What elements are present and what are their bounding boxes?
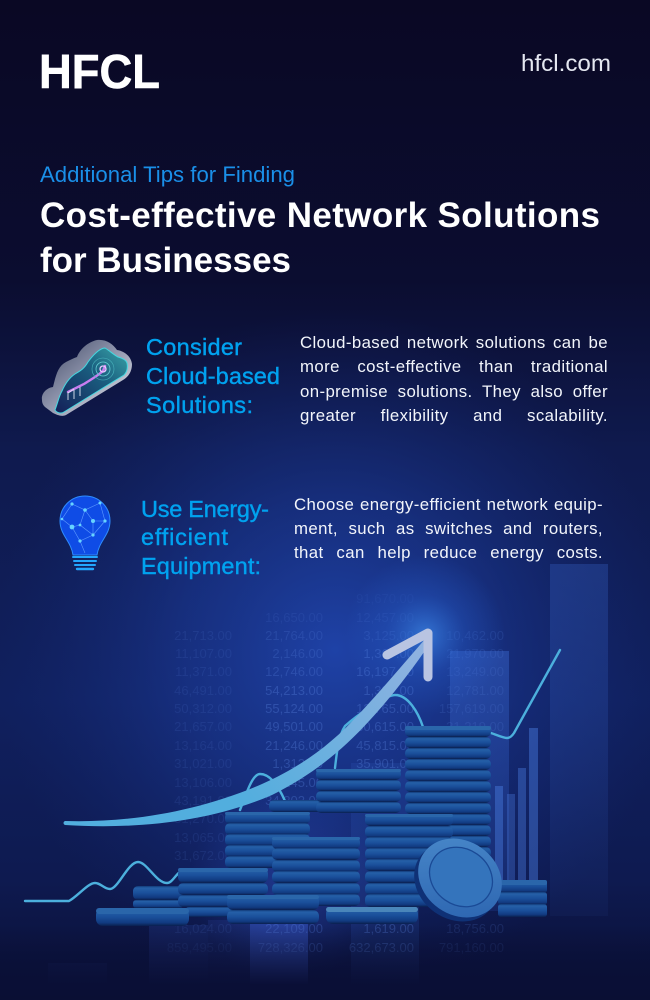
background financial figures table: 859,495.00 — [167, 940, 232, 955]
background financial figures table: 1,367.00 — [363, 646, 414, 661]
background financial figures table: 30,615.00 — [356, 719, 414, 734]
background financial figures table: 11,107.00 — [175, 646, 232, 661]
background financial figures table: 791,160.00 — [439, 940, 504, 955]
background financial figures table: 16,197.00 — [356, 664, 414, 679]
background financial figures table: 31,270.00 — [174, 811, 232, 826]
background financial figures table: 1,312.00 — [272, 756, 323, 771]
background financial figures table: 21,764.00 — [265, 628, 323, 643]
background financial figures table: 728,326.00 — [258, 940, 323, 955]
background financial figures table: 11,371.00 — [175, 664, 232, 679]
background financial figures table: 31,021.00 — [174, 756, 232, 771]
background financial figures table: 13,164.00 — [174, 738, 232, 753]
body text: cloud-based solutions: greater flexibility and scalability. — [300, 406, 608, 425]
background financial figures table: 21,657.00 — [174, 719, 232, 734]
thin trend line — [25, 650, 560, 901]
heading: use energy-efficient equipment: Equipment: — [141, 553, 261, 579]
background financial figures table — [167, 591, 504, 955]
background financial figures table: 35,901.00 — [356, 756, 414, 771]
background financial figures table: 13,106.00 — [174, 775, 232, 790]
background financial figures table: 13,249.00 — [446, 664, 504, 679]
loose coin: front right — [326, 907, 418, 924]
heading: consider cloud-based solutions: Solutions: — [146, 392, 253, 418]
background financial figures table: 50,312.00 — [174, 701, 232, 716]
background financial figures table: 16,650.00 — [265, 610, 323, 625]
background financial figures table: 12,457.00 — [356, 610, 414, 625]
subtitle: Additional Tips for Finding — [40, 162, 295, 187]
background financial figures table: 22,109.00 — [265, 921, 323, 936]
background financial figures table: 1,327.00 — [363, 683, 414, 698]
icon: isometric cloud — [42, 340, 132, 416]
background financial figures table: 46,491.00 — [174, 683, 232, 698]
background financial figures table: 55,124.00 — [265, 701, 323, 716]
panel: cloud-based solutions — [42, 333, 608, 425]
body text: energy-efficient equipment — [294, 495, 603, 562]
heading: use energy-efficient equipment: Use Energy- — [141, 496, 269, 522]
background financial figures table: 2,245.00 — [272, 775, 323, 790]
title: for Businesses — [40, 241, 291, 280]
background financial figures table: 13,765.00 — [356, 701, 414, 716]
large upright coin — [399, 822, 517, 938]
background financial figures table: 12,746.00 — [265, 664, 323, 679]
coin stack: small rear — [269, 769, 401, 813]
website address: hfcl.com — [521, 50, 611, 76]
coin stack: centre left — [225, 812, 310, 868]
background bar chart — [48, 564, 608, 1000]
heading: use energy-efficient equipment: efficient — [141, 524, 228, 550]
background financial figures table: 12,781.00 — [446, 683, 504, 698]
body text: energy-efficient equipment: ment, such as switches and routers, — [294, 519, 603, 538]
background financial figures table: 31,219.00 — [446, 719, 504, 734]
heading: consider cloud-based solutions: Cloud-based — [146, 363, 280, 389]
coin stack: front two — [227, 895, 319, 924]
heading: use energy-efficient equipment — [141, 496, 269, 580]
coin stack: left short — [133, 868, 268, 917]
body text: cloud-based solutions: Cloud-based network solutions can be — [300, 333, 608, 352]
background financial figures table: 10,462.00 — [446, 628, 504, 643]
background financial figures table: 157,619.00 — [439, 701, 504, 716]
heading: consider cloud-based solutions — [146, 334, 280, 418]
coin stack: rear right — [498, 880, 547, 917]
body text: cloud-based solutions: on-premise solutions. They also offer — [300, 382, 608, 401]
background financial figures table: 45,815.00 — [356, 738, 414, 753]
body text: energy-efficient equipment: that can help reduce energy costs. — [294, 543, 603, 562]
heading: consider cloud-based solutions: Consider — [146, 334, 242, 360]
background financial figures table: 16,024.00 — [174, 921, 232, 936]
coin stacks — [96, 726, 547, 938]
background financial figures table: 18,756.00 — [446, 921, 504, 936]
coin stack: right front — [365, 814, 453, 907]
background financial figures table: 21,713.00 — [174, 628, 232, 643]
background financial figures table: 1,619.00 — [363, 921, 414, 936]
icon: glowing light bulb — [60, 496, 110, 570]
body text: energy-efficient equipment: Choose energy-efficient network equip- — [294, 495, 603, 514]
background financial figures table: 21,246.00 — [265, 738, 323, 753]
coin stack: tall — [405, 726, 491, 858]
background financial figures table: 91,670.00 — [356, 591, 414, 606]
body text: cloud-based solutions — [300, 333, 608, 425]
rising growth arrow — [64, 633, 431, 826]
background financial figures table: 13,065.00 — [174, 830, 232, 845]
background financial figures table: 3,125.00 — [363, 628, 414, 643]
background financial figures table: 632,673.00 — [349, 940, 414, 955]
background financial figures table: 49,501.00 — [265, 719, 323, 734]
title: Cost-effective Network Solutions — [40, 196, 600, 235]
background financial figures table: 43,191.00 — [174, 793, 232, 808]
body text: cloud-based solutions: more cost-effective than traditional — [300, 357, 608, 376]
background financial figures table: 31,672.00 — [174, 848, 232, 863]
background financial figures table: 54,213.00 — [265, 683, 323, 698]
background financial figures table: 2,146.00 — [272, 646, 323, 661]
background financial figures table: 21,970.00 — [446, 646, 504, 661]
background financial figures table: 34,202.00 — [265, 793, 323, 808]
loose coin: far left — [96, 908, 189, 926]
title — [40, 196, 600, 280]
coin stack: centre front — [272, 837, 360, 906]
panel: energy-efficient equipment — [60, 495, 603, 580]
